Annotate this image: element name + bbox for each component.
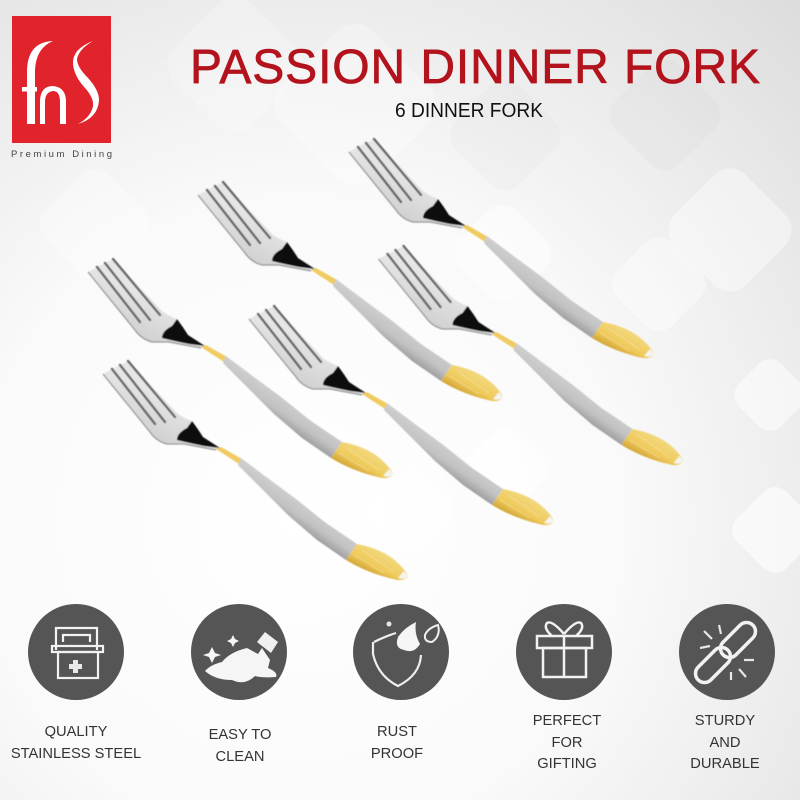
background pattern xyxy=(31,0,800,579)
label: STURDY xyxy=(695,713,755,729)
fork left xyxy=(88,259,393,478)
logo red square xyxy=(12,16,111,143)
icon: toolbox xyxy=(28,604,124,700)
label: FOR xyxy=(551,735,583,751)
label: PERFECT xyxy=(533,713,601,729)
label: AND xyxy=(709,735,741,751)
feature: easy to clean xyxy=(191,604,287,765)
logo tagline: Premium Dining xyxy=(11,149,112,160)
label: RUST xyxy=(377,724,417,740)
logo xyxy=(11,16,112,160)
label: PROOF xyxy=(371,746,423,762)
fork top middle xyxy=(198,182,503,401)
subtitle: 6 DINNER FORK xyxy=(395,100,544,122)
feature: sturdy and durable xyxy=(679,604,775,772)
icon: spill and sparkles xyxy=(191,604,287,700)
fork top right xyxy=(349,139,654,358)
fork centre xyxy=(249,306,554,525)
fork right xyxy=(378,246,684,465)
logo monogram fnS xyxy=(22,41,99,124)
label: DURABLE xyxy=(690,756,760,772)
fork bottom left xyxy=(103,361,408,580)
label: STAINLESS STEEL xyxy=(11,746,141,762)
forks group xyxy=(88,139,684,580)
icon: shield with droplets xyxy=(353,604,449,700)
label: CLEAN xyxy=(216,749,264,765)
label: EASY TO xyxy=(209,727,271,743)
icon: gift box xyxy=(516,604,612,700)
icon: chain link xyxy=(679,604,775,700)
title: PASSION DINNER FORK xyxy=(190,41,760,94)
label: QUALITY xyxy=(45,724,108,740)
feature: quality stainless steel xyxy=(11,604,141,762)
feature: rust proof xyxy=(353,604,449,762)
label: GIFTING xyxy=(537,756,597,772)
feature: perfect for gifting xyxy=(516,604,612,772)
